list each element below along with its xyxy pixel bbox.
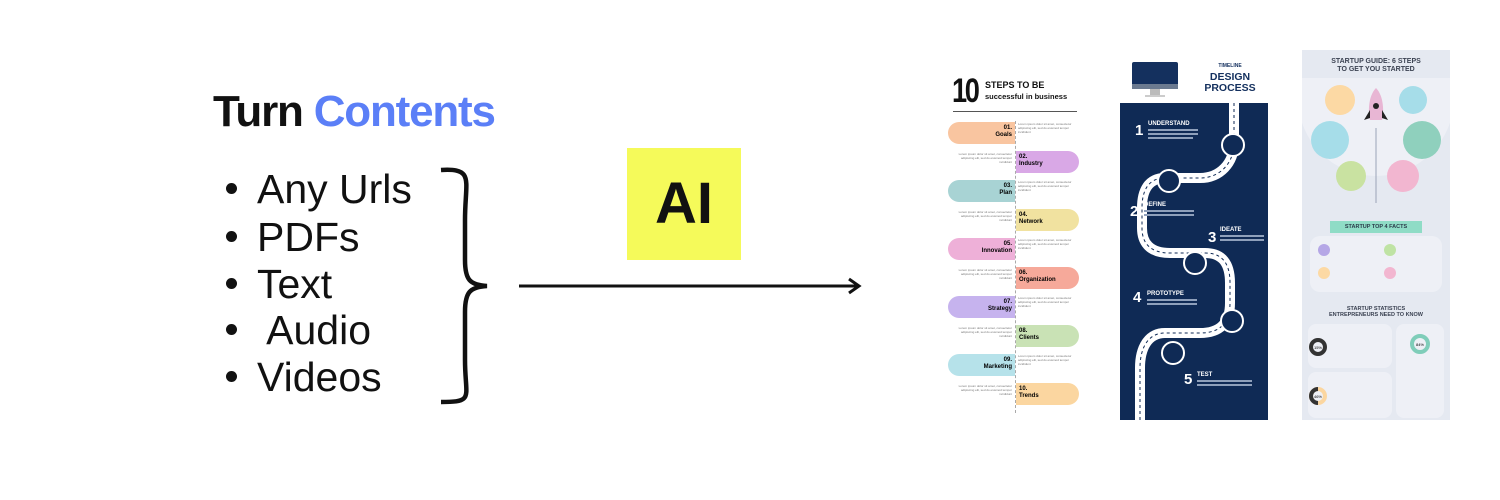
stats heading: ENTREPRENEURS NEED TO KNOW xyxy=(1329,312,1423,318)
road chart: 5 xyxy=(1184,371,1192,388)
panel: 10 steps: 06. xyxy=(1019,270,1027,276)
steps xyxy=(948,122,1015,144)
stats: 46% xyxy=(1314,394,1322,399)
ribbon xyxy=(1330,221,1422,233)
AI box xyxy=(627,148,741,260)
stats heading xyxy=(1329,306,1423,318)
road chart: 2 xyxy=(1130,203,1138,220)
rocket chart xyxy=(1302,78,1450,203)
panel: 10 steps: Innovation xyxy=(982,248,1012,254)
road chart: PROTOTYPE xyxy=(1147,291,1184,297)
bullet list: Videos xyxy=(257,354,382,400)
panel: 10 steps: Industry xyxy=(1019,161,1043,167)
facts box xyxy=(1310,236,1442,292)
heading: DESIGN xyxy=(1210,71,1250,83)
road chart: 3 xyxy=(1208,229,1216,246)
steps: 01. xyxy=(1004,125,1012,131)
AI box: AI xyxy=(655,171,713,236)
heading: TO GET YOU STARTED xyxy=(1337,66,1415,73)
icon: monitor xyxy=(1132,62,1178,97)
panel: 10 steps: Clients xyxy=(1019,335,1039,341)
title: Turn Contents xyxy=(213,87,495,136)
bullet list: PDFs xyxy=(257,214,360,260)
panel: 10 steps: Lorem ipsum dolor sit amet, consectetur adipiscing elit, sed do eiusmod tempor incididunt xyxy=(959,152,1012,164)
panel: 10 steps: 05. xyxy=(1004,241,1012,247)
panel: 10 steps: STEPS TO BE xyxy=(985,80,1044,90)
panel: 10 steps: successful in business xyxy=(985,92,1067,101)
panel: 10 steps: Organization xyxy=(1019,277,1056,283)
lorem blocks: Lorem ipsum dolor sit amet, consectetur adipiscing elit, sed do eiusmod tempor incididunt xyxy=(1018,122,1071,134)
stats heading: STARTUP STATISTICS xyxy=(1347,306,1405,312)
heading: STARTUP GUIDE: 6 STEPS xyxy=(1331,58,1421,65)
panel: 10 steps: Lorem ipsum dolor sit amet, consectetur adipiscing elit, sed do eiusmod tempor incididunt xyxy=(1018,180,1071,192)
panel: startup guide xyxy=(1302,50,1450,420)
panel: 10 steps: Lorem ipsum dolor sit amet, consectetur adipiscing elit, sed do eiusmod tempor incididunt xyxy=(1018,238,1071,250)
road chart: UNDERSTAND xyxy=(1148,121,1190,127)
brace xyxy=(440,168,488,404)
road chart: 1 xyxy=(1135,122,1143,139)
panel: 10 steps: Network xyxy=(1019,219,1043,225)
panel: 10 steps: Trends xyxy=(1019,393,1039,399)
stats: 84% xyxy=(1416,342,1424,347)
panel: 10 steps: Plan xyxy=(999,190,1012,196)
panel: 10 steps: Lorem ipsum dolor sit amet, consectetur adipiscing elit, sed do eiusmod tempor incididunt xyxy=(1018,296,1071,308)
panel: 10 steps: Lorem ipsum dolor sit amet, consectetur adipiscing elit, sed do eiusmod tempor incididunt xyxy=(959,384,1012,396)
panel: 10 steps: Marketing xyxy=(984,364,1012,370)
panel: 10 steps: Lorem ipsum dolor sit amet, consectetur adipiscing elit, sed do eiusmod tempor incididunt xyxy=(959,210,1012,222)
bullet list: Any Urls xyxy=(257,166,412,212)
bullet list xyxy=(226,166,412,400)
panel: 10 steps: Lorem ipsum dolor sit amet, consectetur adipiscing elit, sed do eiusmod tempor incididunt xyxy=(959,268,1012,280)
road chart: TEST xyxy=(1197,372,1213,378)
road chart: DEFINE xyxy=(1144,202,1166,208)
panel: 10 steps: Lorem ipsum dolor sit amet, consectetur adipiscing elit, sed do eiusmod tempor incididunt xyxy=(1018,354,1071,366)
panel: 10 steps: Strategy xyxy=(988,306,1012,312)
road chart xyxy=(1120,103,1268,420)
panel: design process xyxy=(1120,62,1268,420)
heading: 10 xyxy=(952,72,977,110)
heading xyxy=(1331,58,1421,73)
road chart: 4 xyxy=(1133,289,1142,306)
ribbon: STARTUP TOP 4 FACTS xyxy=(1345,224,1407,230)
arrow xyxy=(519,278,862,294)
heading xyxy=(1204,63,1256,94)
panel: 10 steps: 07. xyxy=(1004,299,1012,305)
bullet list: Text xyxy=(257,261,332,307)
panel: 10 steps: 04. xyxy=(1019,212,1027,218)
heading: PROCESS xyxy=(1204,82,1256,94)
panel: 10 steps xyxy=(945,70,1085,420)
road chart: IDEATE xyxy=(1220,227,1242,233)
panel: 10 steps: Lorem ipsum dolor sit amet, consectetur adipiscing elit, sed do eiusmod tempor incididunt xyxy=(959,326,1012,338)
panel: 10 steps: 03. xyxy=(1004,183,1012,189)
panel: 10 steps: 02. xyxy=(1019,154,1027,160)
panel: 10 steps: 10. xyxy=(1019,386,1027,392)
stats: 15% xyxy=(1314,345,1322,350)
bullet list: Audio xyxy=(266,307,371,353)
stats xyxy=(1308,324,1444,418)
panel: 10 steps: 09. xyxy=(1004,357,1012,363)
panel: 10 steps: 08. xyxy=(1019,328,1027,334)
heading: TIMELINE xyxy=(1218,63,1242,69)
steps: Goals xyxy=(995,132,1012,138)
